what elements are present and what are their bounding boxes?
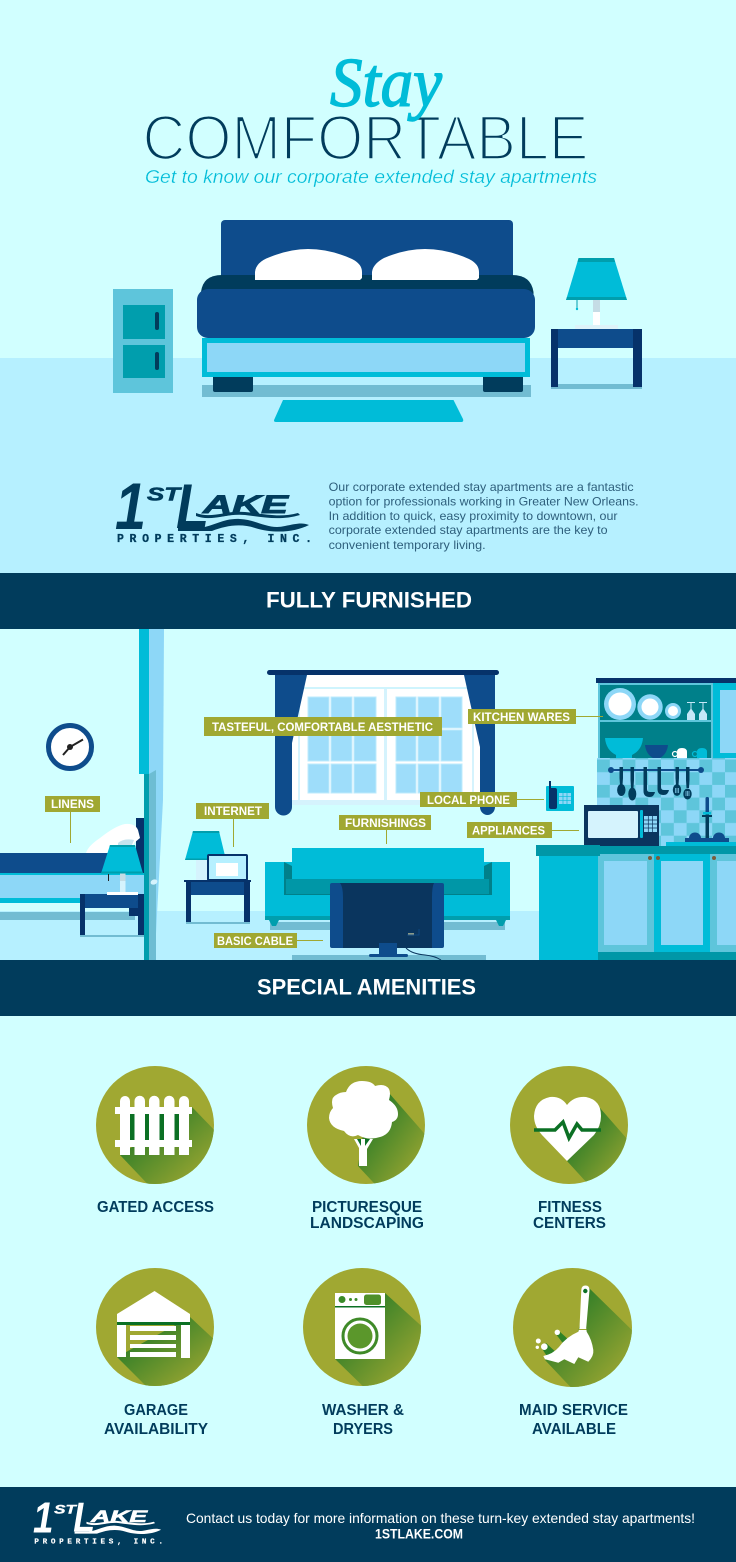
side table with lamp and laptop	[184, 831, 251, 924]
door frame	[139, 629, 164, 960]
bedroom lamp and nightstand	[80, 845, 144, 937]
hero bed	[197, 220, 535, 397]
title: comfortable: COMFORTABLE	[142, 104, 588, 174]
faucet and sink	[666, 797, 736, 846]
sofa	[265, 848, 510, 930]
label: furnishings	[339, 815, 431, 844]
amenity: fitness centers	[510, 1066, 635, 1232]
amenity: garage availability: AVAILABILITY	[104, 1421, 208, 1438]
rug	[274, 400, 463, 422]
intro paragraph: In addition to quick, easy proximity to downtown, our	[329, 509, 618, 523]
label: appliances: APPLIANCES	[472, 826, 545, 838]
amenity: fitness centers: CENTERS	[533, 1215, 606, 1232]
title: stay: Stay	[330, 45, 443, 122]
intro paragraph: Our corporate extended stay apartments are a fantastic	[329, 480, 634, 494]
television	[292, 883, 486, 960]
window and curtains	[267, 670, 499, 816]
kitchen lower cabinets	[598, 846, 736, 960]
intro paragraph: corporate extended stay apartments are the key to	[329, 523, 608, 537]
footer text: Contact us today for more information on these turn-key extended stay apartments!	[186, 1510, 695, 1526]
hero lamp and nightstand	[551, 258, 642, 389]
pillows	[255, 249, 479, 280]
label: linens: LINENS	[51, 799, 94, 811]
curtain rod	[267, 670, 499, 675]
band: fully furnished: FULLY FURNISHED	[266, 588, 472, 612]
desk phone	[546, 781, 574, 811]
title	[142, 45, 597, 187]
plates	[604, 688, 681, 720]
amenity: garage availability: GARAGE	[124, 1402, 188, 1419]
footer logo: AKE	[89, 1508, 149, 1526]
label: internet	[196, 803, 269, 847]
amenity: gated access: GATED ACCESS	[97, 1199, 214, 1216]
amenity: maid service: AVAILABLE	[532, 1421, 616, 1438]
amenity: maid service: MAID SERVICE	[519, 1402, 628, 1419]
floor: apartment	[0, 911, 539, 960]
label: local phone: LOCAL PHONE	[427, 795, 510, 807]
intro paragraph: option for professionals working in Greater New Orleans.	[329, 494, 639, 508]
amenity: maid service	[513, 1268, 640, 1438]
company logo: L	[176, 472, 209, 542]
intro paragraph	[329, 480, 639, 552]
label: kitchen wares	[468, 709, 603, 724]
bedroom bed	[0, 818, 144, 920]
microwave	[584, 805, 659, 846]
band: special amenities	[0, 960, 736, 1016]
footer	[0, 1487, 736, 1562]
amenity: washer and dryers: DRYERS	[333, 1421, 393, 1438]
label: internet: INTERNET	[204, 806, 262, 818]
glasses	[687, 702, 707, 720]
kitchen tile backsplash	[597, 758, 736, 846]
icon: garage	[96, 1268, 220, 1395]
left curtain	[275, 675, 307, 816]
kitchen island	[536, 845, 600, 960]
label: tasteful aesthetic: TASTEFUL, COMFORTABLE AESTHETIC	[212, 720, 433, 734]
footer logo: L	[73, 1494, 95, 1541]
amenity: picturesque landscaping: PICTURESQUE	[312, 1199, 422, 1216]
subtitle: Get to know our corporate extended stay apartments	[145, 166, 597, 187]
icon: broom	[513, 1268, 640, 1395]
icon: washer	[303, 1268, 428, 1395]
label: basic cable	[214, 933, 323, 948]
utensil rail	[608, 767, 704, 800]
icon: fence	[96, 1066, 214, 1184]
amenity: garage availability	[96, 1268, 220, 1438]
intro paragraph: convenient temporary living.	[329, 538, 486, 552]
laptop	[208, 855, 247, 880]
bowls and cups	[605, 738, 707, 758]
footer logo: 1	[33, 1494, 53, 1542]
window panes	[308, 697, 462, 793]
label: linens	[45, 796, 100, 843]
label: appliances	[467, 822, 579, 838]
footer logo: PROPERTIES, INC.	[34, 1539, 163, 1547]
company logo: 1	[115, 469, 146, 543]
band: fully furnished	[0, 573, 736, 629]
footer logo: ST	[54, 1503, 78, 1517]
furnished scene	[0, 629, 736, 960]
company logo: ST	[147, 484, 183, 504]
icon: tree	[307, 1066, 425, 1184]
band: special amenities: SPECIAL AMENITIES	[257, 974, 476, 1000]
amenity: picturesque landscaping	[307, 1066, 430, 1232]
footer logo	[33, 1494, 163, 1547]
wall clock	[48, 726, 92, 768]
kitchen upper cabinet	[596, 678, 736, 759]
label: basic cable: BASIC CABLE	[217, 936, 293, 948]
label: furnishings: FURNISHINGS	[345, 818, 426, 830]
icon: heart	[510, 1066, 635, 1195]
amenity: picturesque landscaping: LANDSCAPING	[310, 1215, 424, 1232]
amenity: washer and dryers: WASHER &	[322, 1402, 404, 1419]
amenity: fitness centers: FITNESS	[538, 1199, 602, 1216]
amenity: gated access	[96, 1066, 220, 1216]
label: kitchen wares: KITCHEN WARES	[473, 712, 570, 724]
company logo	[115, 469, 312, 546]
company logo: PROPERTIES, INC.	[117, 533, 312, 546]
label: local phone	[420, 792, 544, 807]
right curtain	[464, 675, 495, 815]
amenity: washer and dryers	[303, 1268, 428, 1438]
floor: hero room	[0, 358, 736, 573]
footer url: 1STLAKE.COM	[375, 1526, 463, 1542]
company logo: AKE	[201, 491, 290, 519]
dresser	[113, 289, 173, 393]
